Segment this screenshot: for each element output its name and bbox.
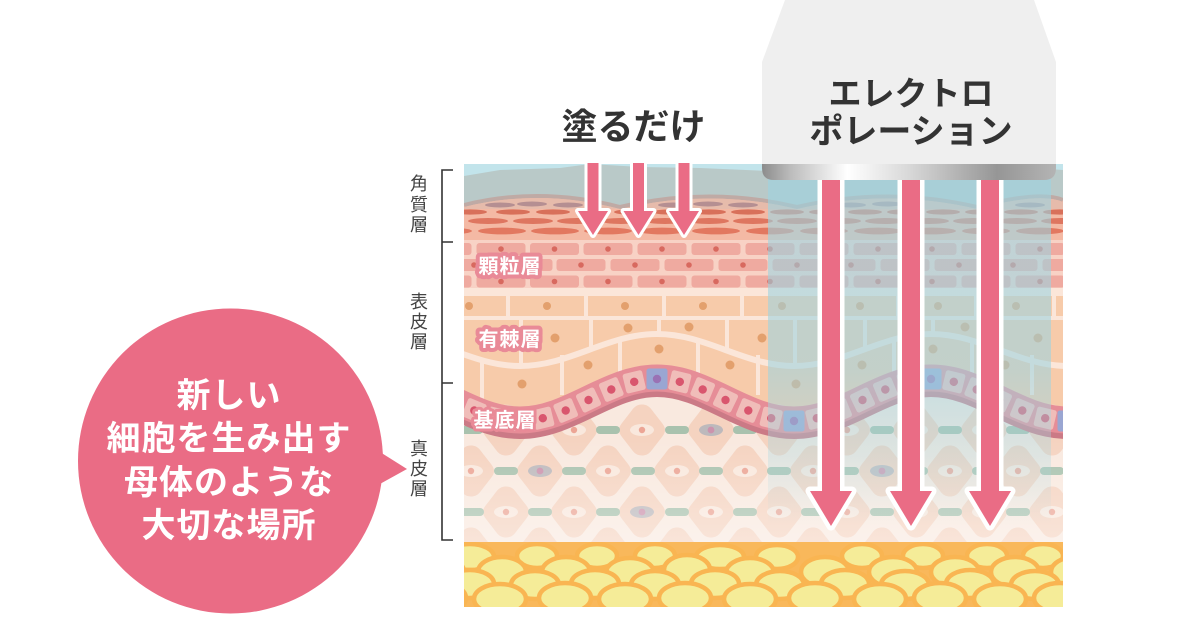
label: stratum corneum: 質 <box>410 195 428 215</box>
label: spinous layer: 有棘層 <box>478 328 542 351</box>
callout text: 細胞を生み出す <box>106 420 352 458</box>
label: epidermis: 層 <box>410 332 428 352</box>
arrows: topical application <box>578 163 699 235</box>
callout text: 大切な場所 <box>142 507 316 545</box>
callout text: 新しい <box>176 377 282 415</box>
skin cross-section <box>464 164 1063 607</box>
label: dermis <box>410 439 428 499</box>
label: stratum corneum: 角 <box>410 174 428 194</box>
arrow 1 <box>578 163 608 235</box>
corneum cell rows <box>424 198 1081 234</box>
label: granular layer: 顆粒層 <box>478 255 542 278</box>
electroporation blue overlay <box>768 178 1051 525</box>
arrow 3 <box>669 163 699 235</box>
long arrow 1 <box>810 170 852 526</box>
arrow 2 <box>624 163 654 235</box>
arrows: electroporation <box>810 170 1011 526</box>
label: stratum corneum: 層 <box>410 215 428 235</box>
label: stratum corneum <box>410 174 428 235</box>
granular layer <box>464 240 1063 288</box>
corneum wavy stripe <box>464 196 1063 207</box>
label: dermis: 真 <box>410 439 428 459</box>
label: dermis: 層 <box>410 479 428 499</box>
label: epidermis: 皮 <box>410 312 428 332</box>
device label: エレクトロ <box>828 75 994 112</box>
basal layer <box>383 368 1078 432</box>
long arrow 2 <box>890 170 932 526</box>
dermis <box>464 397 1063 542</box>
label: dermis: 皮 <box>410 459 428 479</box>
long arrow 3 <box>969 170 1011 526</box>
subcutaneous fat <box>464 542 1063 607</box>
heading: topical only: 塗るだけ <box>561 106 706 147</box>
stratum corneum base <box>464 198 1063 240</box>
callout text: 母体のような <box>124 464 334 502</box>
callout pointer <box>378 452 407 485</box>
layer bracket <box>442 170 453 540</box>
callout text <box>106 377 352 545</box>
spinous layer <box>464 288 1063 406</box>
label: basal layer: 基底層 <box>474 409 536 432</box>
top light blue surface <box>464 164 1063 176</box>
label: epidermis <box>410 292 428 352</box>
device metal tip <box>762 164 1056 180</box>
device: electroporation head <box>762 0 1056 180</box>
corneum grey band <box>464 164 1063 207</box>
label: epidermis: 表 <box>410 292 428 312</box>
device: electroporation head: ポレーション <box>809 113 1013 151</box>
callout bubble <box>78 308 407 614</box>
